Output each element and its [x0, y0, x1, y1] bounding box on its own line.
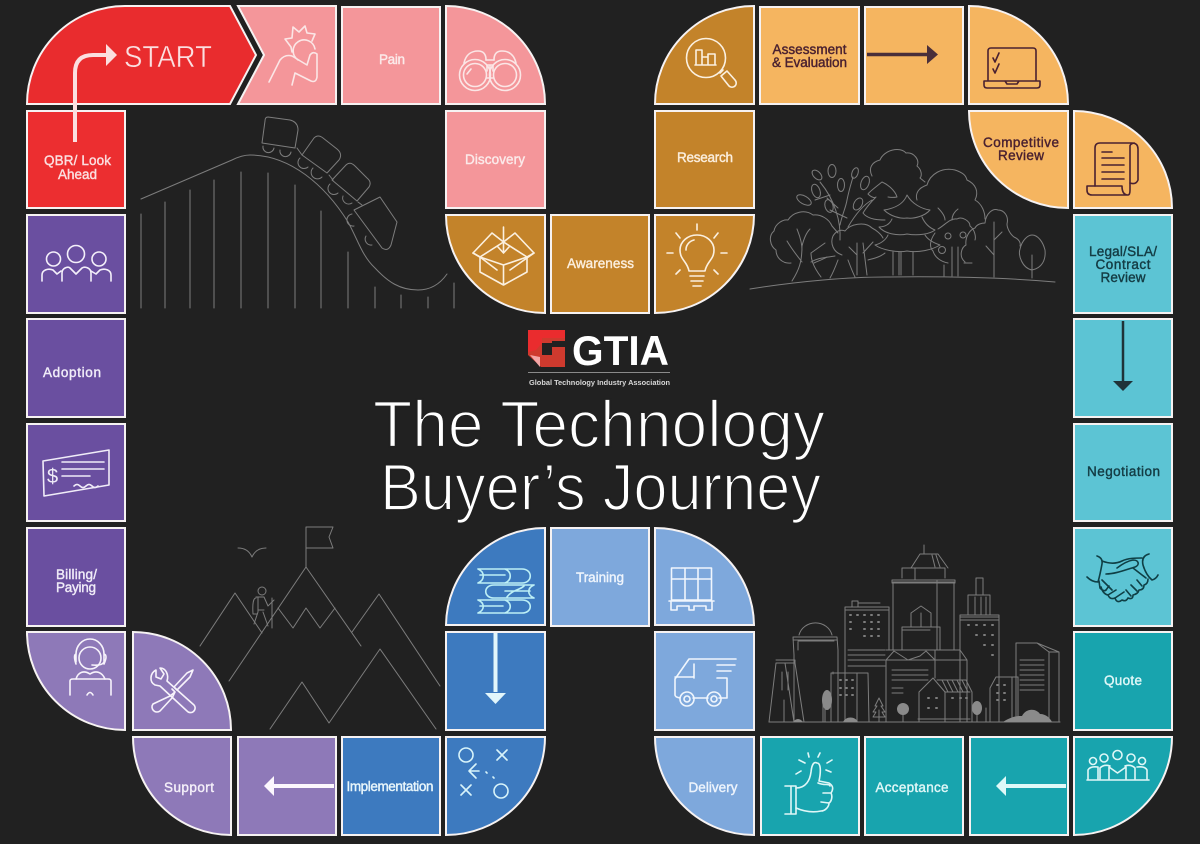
- tile: headset icon: [27, 632, 125, 730]
- illustration: mountains: [200, 527, 440, 729]
- tile: box icon: [446, 215, 545, 313]
- tile: pallet icon: [655, 528, 754, 625]
- icon: books: [478, 569, 534, 613]
- tile: Legal/SLA/Contract Review: Contract: [1096, 257, 1151, 272]
- tile: Negotiation: [1074, 424, 1172, 521]
- tile: blue down arrow: [446, 632, 545, 730]
- logo: GTIA: Global Technology Industry Association: [529, 378, 670, 387]
- arrow: down blue: [485, 633, 506, 704]
- arrow: left purple: [264, 776, 334, 796]
- logo: GTIA: GTIA: [572, 327, 669, 374]
- owl tree: [931, 208, 975, 276]
- arrow: start path: [75, 44, 117, 142]
- tile: Training: [551, 528, 649, 626]
- icon: wrench and screwdriver: [151, 668, 195, 713]
- icon: open box: [473, 227, 534, 285]
- icon: lightbulb: [667, 224, 727, 286]
- tile: Research: Research: [677, 150, 733, 165]
- title: Buyer’s Journey: [380, 450, 821, 524]
- icon: person in pain: [269, 26, 317, 85]
- illustration: forest: [750, 149, 1055, 289]
- tile: Pain: [342, 7, 440, 104]
- tile: Adoption: [27, 319, 125, 417]
- tile: Assessment & Evaluation: [760, 7, 859, 104]
- tile: down arrow: [1074, 319, 1172, 417]
- right tree: [916, 169, 985, 219]
- tile: people icon: [27, 215, 125, 313]
- icon: cheque: $: [47, 466, 58, 488]
- tile: pain icon: [238, 6, 336, 104]
- mid tree: [814, 224, 885, 278]
- tile: QBR/ Look Ahead: QBR/ Look: [44, 153, 111, 168]
- pine: [875, 195, 940, 275]
- tile: Acceptance: [865, 737, 963, 835]
- right small tree: [961, 210, 1020, 277]
- tile: START: [27, 6, 256, 104]
- icon: contract scroll: [1087, 143, 1138, 195]
- arrow: down: [1113, 321, 1133, 391]
- icon: magnifier with chart: [686, 38, 736, 87]
- logo mark: [528, 330, 565, 367]
- tile: Competitive Review: Competitive: [983, 135, 1059, 150]
- tile: cheque icon: [27, 424, 125, 521]
- tile: Legal/SLA/Contract Review: Legal/SLA/: [1089, 244, 1157, 259]
- tile: books icon: [446, 528, 545, 625]
- tile: group icon: [1074, 737, 1172, 835]
- icon: three people: [42, 246, 111, 281]
- tile: Acceptance: Acceptance: [876, 780, 948, 795]
- tile: Competitive Review: [969, 111, 1068, 208]
- icon: delivery van: [675, 659, 736, 706]
- tile: scroll icon: [1074, 111, 1172, 208]
- icon: group of people: [1087, 750, 1149, 780]
- icon: game plan: [459, 748, 508, 798]
- back blob: [863, 182, 897, 220]
- hiker: [253, 587, 274, 628]
- icon: laptop checklist: [984, 48, 1040, 88]
- tile: Delivery: Delivery: [688, 780, 738, 795]
- tile: Awareness: Awareness: [567, 256, 634, 271]
- tile: Discovery: [446, 111, 545, 208]
- logo: GTIA: [528, 327, 670, 387]
- tile: Negotiation: Negotiation: [1087, 464, 1160, 479]
- tile: Billing/Paying: Billing/: [56, 567, 97, 582]
- tile: right arrow: [865, 7, 963, 104]
- tile: Awareness: [551, 215, 649, 313]
- START label: START: [124, 39, 212, 74]
- leafy tree: [795, 164, 872, 240]
- icon: pallet: [669, 568, 714, 610]
- tile: Assessment & Evaluation: Assessment: [772, 42, 847, 57]
- tile: Discovery: Discovery: [465, 152, 525, 167]
- back tree: [870, 149, 925, 182]
- tile: Billing/Paying: Paying: [56, 580, 96, 595]
- illustration: city skyline: [769, 545, 1060, 722]
- tile: QBR/ Look Ahead: Ahead: [58, 167, 97, 182]
- tile: Competitive Review: Review: [998, 148, 1044, 163]
- tile: Delivery: [655, 737, 754, 835]
- icon: binoculars: [460, 51, 520, 90]
- tile: purple left arrow: [238, 737, 336, 835]
- tile: Quote: [1074, 632, 1172, 730]
- tile: Support: [133, 737, 231, 835]
- icon: thumbs up: [785, 753, 833, 814]
- poplar tree: [1020, 235, 1045, 278]
- left tree: [770, 212, 838, 281]
- tile: Research: [655, 111, 754, 208]
- tile: Pain: Pain: [379, 52, 405, 67]
- tile: thumbs up icon: [761, 737, 859, 835]
- tile: Legal/SLA/Contract Review: Review: [1100, 270, 1146, 285]
- tile: Support: Support: [164, 780, 214, 795]
- tile: Implementation: [342, 737, 440, 835]
- tile: Quote: Quote: [1104, 673, 1142, 688]
- tile: left arrow teal: [970, 737, 1068, 835]
- arrow: right: [867, 45, 938, 64]
- title: [373, 387, 825, 524]
- tile: QBR/ Look Ahead: [27, 111, 125, 208]
- tile: van icon: [655, 632, 754, 730]
- illustration: roller coaster: [141, 117, 454, 308]
- tile: binoculars: [446, 6, 545, 104]
- tile: tools icon: [133, 632, 231, 730]
- tile: Adoption: Adoption: [43, 365, 101, 380]
- tile: Legal/SLA/Contract Review: [1074, 215, 1172, 313]
- tile: plays icon: [446, 737, 545, 835]
- tile: Assessment & Evaluation: & Evaluation: [772, 55, 847, 70]
- tile: lightbulb icon: [655, 215, 754, 313]
- tile: handshake icon: [1074, 528, 1172, 626]
- icon: support agent: [70, 639, 111, 695]
- tile: Implementation: Implementation: [346, 779, 434, 794]
- icon: handshake: [1087, 554, 1158, 602]
- tile: laptop icon: [969, 6, 1068, 104]
- tile: magnifier icon: [655, 6, 754, 104]
- arrow: left teal: [996, 776, 1066, 796]
- tile: Billing/Paying: [27, 528, 125, 626]
- tile: Training: Training: [576, 570, 624, 585]
- title: The Technology: [373, 387, 825, 461]
